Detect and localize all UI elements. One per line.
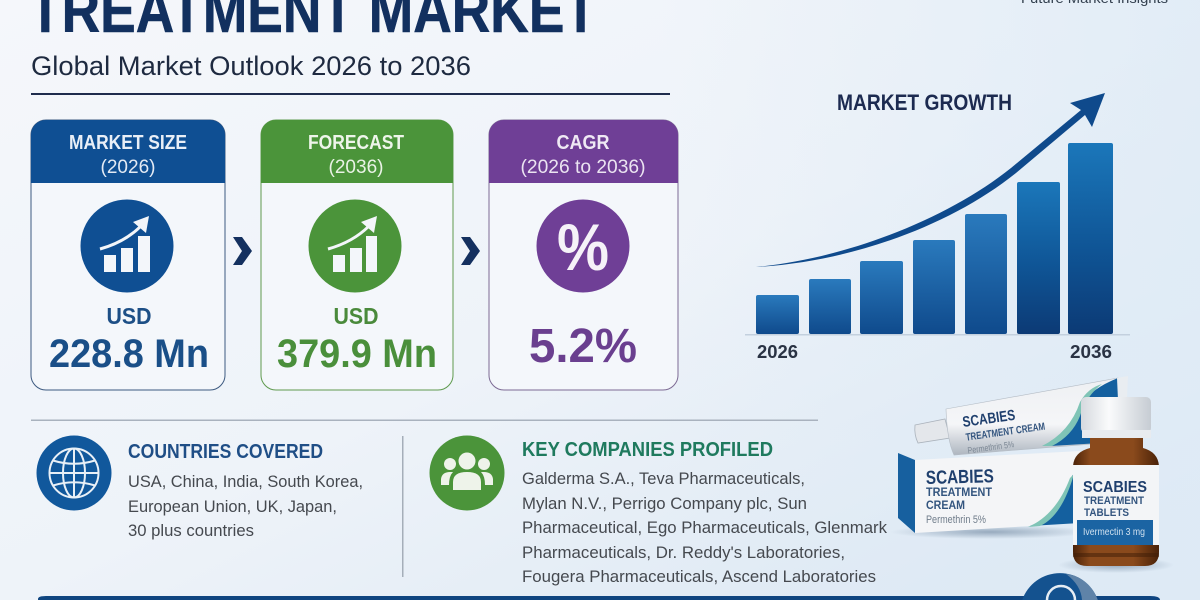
market size value: 228.8 Mn	[49, 332, 209, 376]
market size header	[31, 120, 225, 183]
countries list: 30 plus countries	[128, 521, 254, 540]
bottle text	[1083, 479, 1147, 538]
countries list: European Union, UK, Japan,	[128, 497, 337, 516]
product: tablets bottle	[1058, 397, 1174, 573]
companies list: Pharmaceuticals, Dr. Reddy's Laboratories,	[522, 543, 845, 562]
subtitle: Global Market Outlook 2026 to 2036	[31, 51, 471, 81]
icon: percent	[536, 200, 630, 292]
market size heading: MARKET SIZE	[69, 132, 187, 154]
box text: Permethrin 5%	[926, 514, 986, 526]
bottle text: Ivermectin 3 mg	[1083, 526, 1145, 538]
countries heading: COUNTRIES COVERED	[128, 441, 323, 463]
icon: people	[430, 436, 504, 510]
growth arrow	[756, 93, 1105, 267]
box text: CREAM	[926, 498, 965, 512]
box text: TREATMENT	[926, 485, 993, 499]
box text	[926, 466, 994, 526]
forecast value: 379.9 Mn	[277, 332, 437, 376]
tube text: SCABIES	[961, 407, 1016, 431]
companies list: Fougera Pharmaceuticals, Ascend Laboratories	[522, 567, 876, 586]
countries list: USA, China, India, South Korea,	[128, 472, 363, 491]
market size year: (2026)	[100, 157, 156, 178]
chart: market growth	[745, 90, 1130, 362]
tube text: Permethrin 5%	[967, 439, 1015, 456]
icon: percent: %	[557, 210, 609, 284]
tube text: TREATMENT CREAM	[965, 421, 1046, 444]
panel: market size	[31, 120, 225, 390]
forecast year: (2036)	[328, 157, 384, 178]
footer badge	[1022, 573, 1098, 600]
icon: globe	[36, 436, 112, 510]
icon: growth chart	[308, 200, 402, 292]
companies list	[522, 469, 887, 586]
box text: SCABIES	[926, 466, 994, 489]
cagr header	[489, 120, 678, 183]
companies list: Pharmaceutical, Ego Pharmaceuticals, Glenmark	[522, 518, 887, 537]
cagr years: (2026 to 2036)	[520, 157, 646, 178]
icon: growth chart	[80, 200, 174, 292]
bottle text: TABLETS	[1084, 507, 1129, 519]
axis label end: 2036	[1070, 342, 1112, 362]
arrow: forecast to cagr	[461, 237, 480, 265]
companies heading: KEY COMPANIES PROFILED	[522, 439, 773, 461]
companies list: Mylan N.V., Perrigo Company plc, Sun	[522, 494, 807, 513]
companies list: Galderma S.A., Teva Pharmaceuticals,	[522, 469, 805, 488]
product: cream box	[890, 451, 1090, 539]
bars	[756, 143, 1113, 334]
bottle text: TREATMENT	[1084, 495, 1144, 507]
panel: forecast	[261, 120, 453, 390]
product: cream tube	[915, 376, 1128, 456]
cagr heading: CAGR	[556, 132, 610, 154]
forecast heading: FORECAST	[308, 132, 404, 154]
chart heading: MARKET GROWTH	[837, 90, 1012, 115]
axis label start: 2026	[757, 342, 798, 362]
panel: key companies	[430, 436, 887, 586]
panel: cagr	[489, 120, 678, 390]
market size currency: USD	[106, 303, 152, 329]
forecast header	[261, 120, 453, 183]
footer bar	[38, 573, 1160, 600]
arrow: size to forecast	[233, 237, 252, 265]
cagr value: 5.2%	[529, 320, 637, 373]
forecast currency: USD	[334, 303, 378, 329]
bottle text: SCABIES	[1083, 479, 1147, 496]
tube text	[961, 403, 1048, 456]
panel: countries covered	[36, 436, 363, 540]
countries list	[128, 472, 363, 540]
